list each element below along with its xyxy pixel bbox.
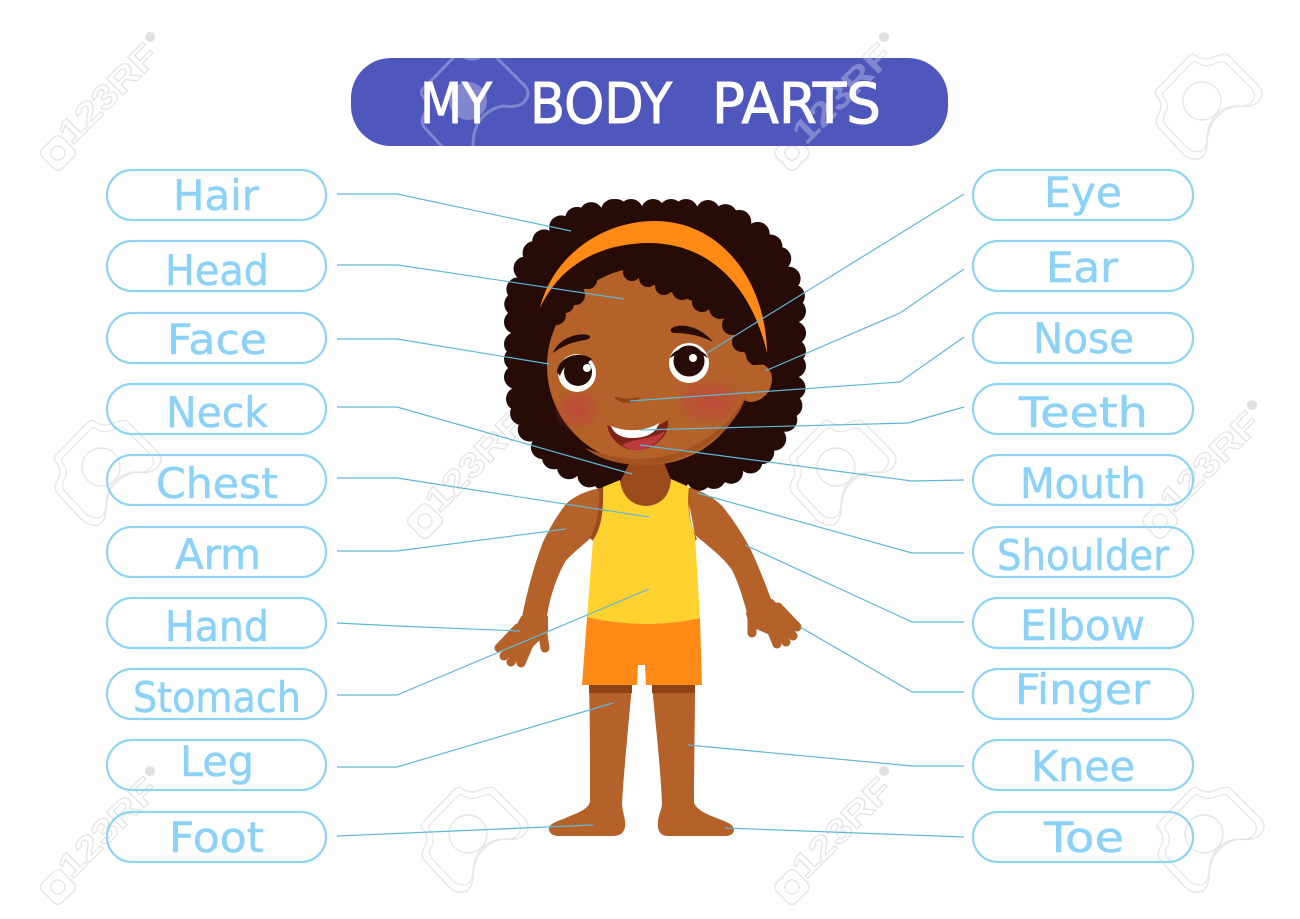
nose <box>615 397 639 402</box>
line: Knee <box>688 745 964 766</box>
watermark: egg logo top right <box>1155 54 1262 159</box>
label: Finger: Finger <box>1015 665 1151 714</box>
line: Face <box>337 339 549 364</box>
label: Ear: Ear <box>1046 243 1119 292</box>
hairband <box>540 221 767 353</box>
line: Mouth <box>640 445 964 481</box>
line: Ear <box>765 269 964 371</box>
title watermark overlay: 123RF <box>785 36 900 152</box>
line: Hair <box>337 194 571 231</box>
line: Foot <box>337 825 593 836</box>
label: Nose: Nose <box>1033 314 1134 363</box>
cheeks <box>553 378 746 432</box>
label: Stomach: Stomach <box>133 673 301 722</box>
title watermark overlay <box>421 36 900 159</box>
watermark: 123RF bottom left <box>38 766 166 907</box>
face <box>547 267 749 465</box>
shorts <box>582 617 702 685</box>
leg shadows <box>589 685 695 693</box>
label: Elbow: Elbow <box>1020 601 1145 650</box>
line: Leg <box>337 703 613 767</box>
line: Toe <box>725 828 964 837</box>
title text: MY <box>420 72 493 137</box>
label: Hand: Hand <box>165 602 269 651</box>
line: Nose <box>630 337 964 401</box>
leader lines right <box>630 194 964 837</box>
label: Foot <box>107 812 326 862</box>
jaw shadow <box>585 392 747 465</box>
line: Neck <box>337 407 632 474</box>
label: Head <box>107 241 326 295</box>
watermark: 123RF mid right <box>1140 400 1268 541</box>
neck <box>620 460 672 506</box>
armhole shadows <box>590 488 697 541</box>
label: Hair: Hair <box>173 171 260 220</box>
right labels <box>973 168 1193 862</box>
line: Head <box>337 265 624 299</box>
watermark: egg logo mid right <box>789 420 896 525</box>
watermark: 123RF mid left: 123RF <box>418 404 533 520</box>
watermark: 123RF top left <box>38 32 166 173</box>
hair <box>516 211 794 479</box>
label: Finger <box>973 665 1193 719</box>
line: Chest <box>337 478 649 517</box>
line: Eye <box>707 194 964 353</box>
line: Elbow <box>745 545 964 622</box>
right eye <box>669 343 709 383</box>
watermark: 123RF top left: 123RF <box>51 36 166 152</box>
line: Shoulder <box>697 493 964 553</box>
label: Elbow <box>973 598 1193 650</box>
label: Hair <box>107 170 326 220</box>
label: Nose <box>973 313 1193 363</box>
label: Mouth <box>973 455 1193 508</box>
leader lines left <box>337 194 649 836</box>
line: Teeth <box>640 407 964 430</box>
label: Toe <box>973 812 1193 862</box>
illustration: girl <box>499 211 797 836</box>
watermark: egg logo bottom right <box>1157 787 1264 892</box>
label: Neck: Neck <box>166 388 269 437</box>
label: Leg <box>107 737 326 790</box>
line: Hand <box>337 623 520 631</box>
right arm <box>686 487 797 644</box>
label: Toe: Toe <box>1043 813 1124 862</box>
line: Arm <box>337 529 566 551</box>
label: Ear <box>973 241 1193 292</box>
label: Arm <box>107 527 326 579</box>
watermark: 123RF bottom middle: 123RF <box>785 770 900 886</box>
label: Leg: Leg <box>180 737 254 786</box>
label: Head: Head <box>165 246 269 295</box>
label: Knee <box>973 740 1193 791</box>
left leg <box>549 685 632 836</box>
watermark: 123RF mid left <box>405 400 533 541</box>
label: Eye: Eye <box>1044 168 1122 217</box>
watermark: egg logo mid left <box>54 420 161 525</box>
label: Face <box>107 313 326 364</box>
line: Finger <box>800 627 964 692</box>
left arm <box>499 487 606 663</box>
label: Arm: Arm <box>175 530 261 579</box>
label: Knee: Knee <box>1031 742 1135 791</box>
label: Shoulder: Shoulder <box>997 531 1170 580</box>
left hand <box>499 617 547 663</box>
ear <box>735 360 772 402</box>
label: Foot: Foot <box>169 813 264 862</box>
right hand <box>747 600 797 644</box>
left labels <box>107 170 326 862</box>
watermark: egg logo bottom middle <box>421 787 528 892</box>
watermark: 123RF bottom left: 123RF <box>51 770 166 886</box>
label: Teeth <box>973 384 1193 437</box>
label: Eye <box>973 168 1193 220</box>
watermark: 123RF top middle <box>772 32 900 173</box>
label: Neck <box>107 384 326 437</box>
title text <box>420 72 881 137</box>
watermark: 123RF top middle: 123RF <box>785 36 900 152</box>
label: Chest <box>107 455 326 508</box>
label: Teeth: Teeth <box>1018 388 1148 437</box>
label: Chest: Chest <box>156 459 278 508</box>
mouth <box>607 420 668 450</box>
fringe <box>535 232 785 365</box>
title banner <box>351 36 948 159</box>
watermark: 123RF mid right: 123RF <box>1153 404 1268 520</box>
shirt <box>587 479 700 624</box>
left eye <box>557 354 596 392</box>
watermark: 123RF bottom middle <box>772 766 900 907</box>
label: Mouth: Mouth <box>1020 459 1146 508</box>
label: Face: Face <box>167 315 267 364</box>
line: Stomach <box>337 589 649 695</box>
eyebrows <box>553 326 713 353</box>
right leg <box>652 685 734 836</box>
title text: BODY <box>530 72 673 137</box>
title text: PARTS <box>712 72 881 137</box>
label: Hand <box>107 598 326 651</box>
